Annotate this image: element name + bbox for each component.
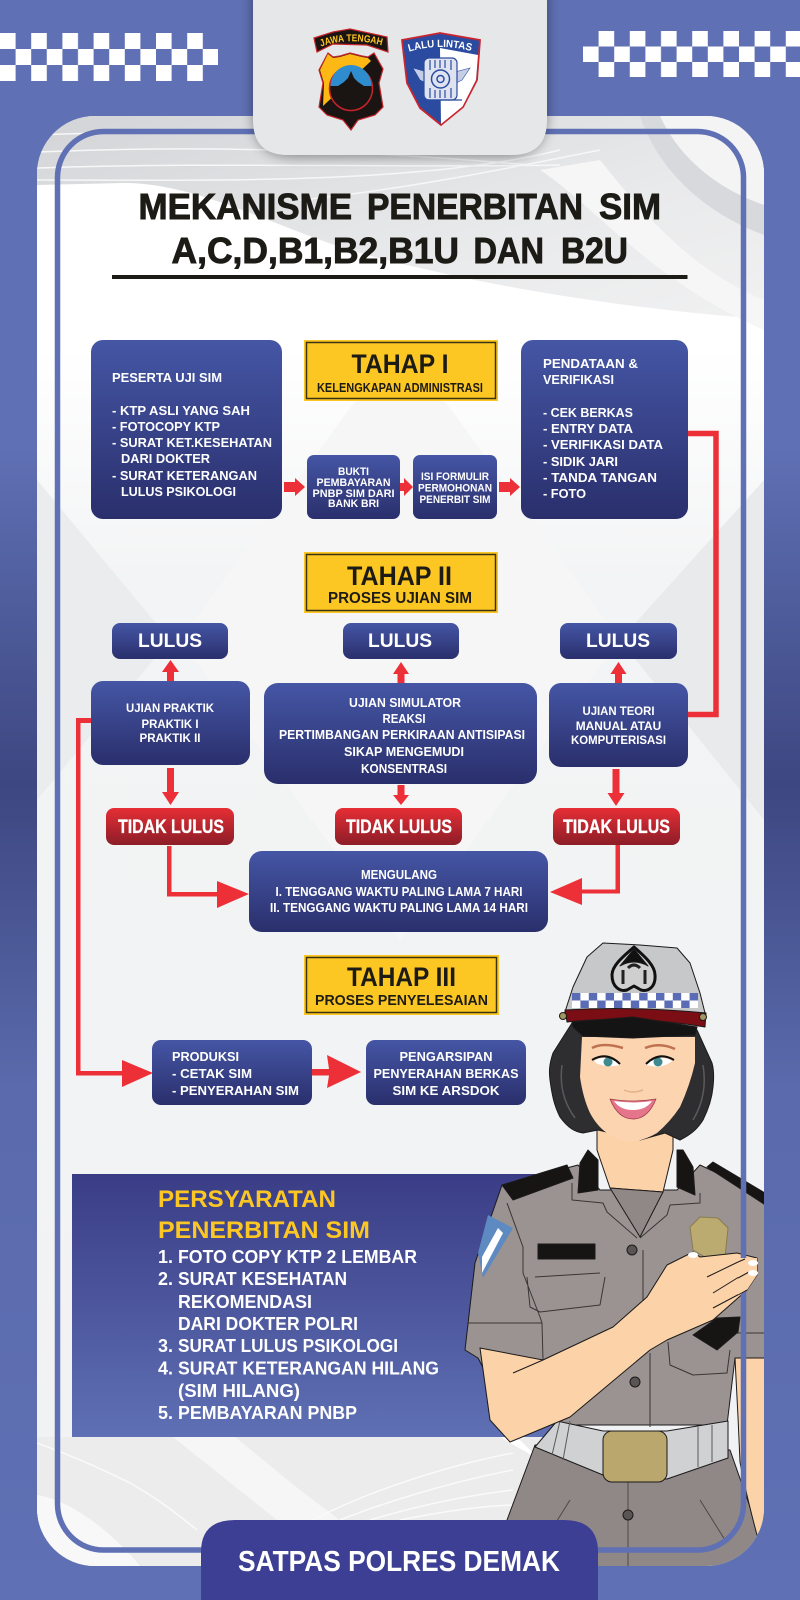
panel: pendataan dan verifikasi	[521, 340, 688, 519]
panel: mengulang: I. TENGGANG WAKTU PALING LAMA 7 HARI	[276, 884, 522, 899]
panel: ujian praktik	[91, 681, 250, 765]
panel: ujian teori: UJIAN TEORI	[582, 704, 654, 718]
heading: tahap II: TAHAP II	[347, 561, 452, 591]
officer pocket flap	[693, 1317, 740, 1350]
heading: title: MEKANISME	[138, 186, 352, 227]
officer right eye	[646, 1056, 674, 1067]
panel: persyaratan penerbitan sim: SURAT KESEHATAN	[178, 1269, 347, 1289]
arrow: praktik to produksi	[76, 718, 153, 1087]
officer buttons	[627, 1245, 637, 1255]
panel: pendataan dan verifikasi: - VERIFIKASI DATA	[543, 437, 664, 452]
officer badge	[690, 1217, 728, 1260]
logo: lalu lintas	[401, 32, 481, 126]
panel: bukti pembayaran: BANK BRI	[328, 498, 379, 510]
panel: mengulang: II. TENGGANG WAKTU PALING LAMA 14 HARI	[270, 900, 528, 915]
panel: peserta uji sim: - FOTOCOPY KTP	[112, 419, 220, 434]
officer face	[580, 1037, 695, 1142]
heading: title: B2U	[561, 230, 628, 271]
panel: ujian praktik: UJIAN PRAKTIK	[126, 703, 215, 715]
panel: persyaratan penerbitan sim: PERSYARATAN	[158, 1186, 336, 1213]
officer hat emblem	[612, 947, 655, 990]
heading: tahap I	[304, 340, 498, 401]
officer shirt	[465, 1165, 770, 1425]
footer tab: satpas polres demak	[201, 1520, 598, 1600]
arrow: bukti to isi formulir	[400, 478, 413, 496]
arrow: praktik to tidak lulus	[162, 768, 179, 805]
illustration: police officer	[465, 943, 770, 1575]
panel: ujian simulator: PERTIMBANGAN PERKIRAAN ANTISIPASI	[279, 727, 525, 742]
arrow: praktik to lulus	[162, 660, 179, 681]
logo: lalu lintas: LALU LINTAS	[408, 40, 472, 52]
panel: persyaratan penerbitan sim: DARI DOKTER POLRI	[178, 1314, 358, 1334]
heading: tahap I: TAHAP I	[352, 349, 448, 379]
heading: tahap II: PROSES UJIAN SIM	[328, 590, 472, 607]
panel: produksi: - CETAK SIM	[172, 1067, 252, 1081]
panel: persyaratan penerbitan sim: REKOMENDASI	[178, 1292, 312, 1312]
logo: jawa tengah: JAWA TENGAH	[320, 34, 383, 46]
result: tidak lulus simulator: TIDAK LULUS	[346, 816, 452, 838]
panel: ujian simulator: KONSENTRASI	[361, 761, 447, 776]
panel: pengarsipan: PENGARSIPAN	[400, 1050, 492, 1064]
officer hat	[563, 943, 706, 1018]
connector: pendataan to ujian teori	[688, 434, 716, 714]
illustration: officer fingertips over frame	[738, 1258, 758, 1296]
logo: jawa tengah	[313, 28, 389, 131]
panel: persyaratan penerbitan sim: 3.	[158, 1336, 173, 1356]
result: tidak lulus simulator	[335, 808, 462, 845]
panel: peserta uji sim: - KTP ASLI YANG SAH	[112, 403, 250, 418]
panel: ujian teori: MANUAL ATAU	[576, 719, 661, 733]
panel: bukti pembayaran	[307, 455, 400, 519]
panel: peserta uji sim: PESERTA UJI SIM	[112, 370, 222, 385]
result: tidak lulus praktik: TIDAK LULUS	[118, 816, 224, 838]
panel: pendataan dan verifikasi: PENDATAAN &	[543, 356, 638, 371]
heading: title: A,C,D,B1,B2,B1U	[172, 230, 459, 271]
panel: pendataan dan verifikasi: - ENTRY DATA	[543, 421, 634, 436]
arrow: tidak lulus teori to mengulang	[550, 845, 620, 905]
panel: persyaratan penerbitan sim: SURAT LULUS PSIKOLOGI	[178, 1336, 398, 1356]
panel: persyaratan penerbitan sim: PENERBITAN SIM	[158, 1217, 370, 1244]
arrow: isi formulir to pendataan	[499, 478, 520, 496]
result: tidak lulus teori	[553, 808, 680, 845]
officer arm	[480, 1252, 757, 1442]
officer belt buckle	[603, 1431, 667, 1482]
heading: tahap III: TAHAP III	[347, 962, 456, 992]
officer hair	[549, 1023, 714, 1140]
panel: persyaratan penerbitan sim: PEMBAYARAN PNBP	[178, 1403, 357, 1423]
checker pattern right	[583, 31, 800, 77]
panel: pengarsipan	[366, 1040, 526, 1105]
result: lulus praktik	[112, 623, 228, 659]
officer name tag	[538, 1244, 595, 1259]
arrow: produksi to pengarsipan	[312, 1055, 361, 1088]
panel: peserta uji sim: - SURAT KETERANGAN	[112, 468, 257, 483]
panel: peserta uji sim	[91, 340, 282, 519]
arrow: peserta to bukti	[284, 478, 305, 496]
panel: persyaratan penerbitan sim: (SIM HILANG)	[178, 1381, 300, 1401]
panel: ujian simulator: UJIAN SIMULATOR	[349, 695, 462, 710]
panel: ujian simulator: SIKAP MENGEMUDI	[344, 744, 464, 759]
panel: produksi	[152, 1040, 312, 1105]
panel: isi formulir	[413, 455, 497, 519]
panel: persyaratan penerbitan sim: SURAT KETERANGAN HILANG	[178, 1358, 439, 1378]
panel: ujian simulator	[264, 683, 537, 784]
panel: isi formulir: PERMOHONAN	[418, 482, 492, 494]
panel: persyaratan penerbitan sim: 5.	[158, 1403, 173, 1423]
panel: pengarsipan: PENYERAHAN BERKAS	[374, 1067, 518, 1081]
officer neck	[597, 1130, 673, 1192]
panel: pendataan dan verifikasi: - TANDA TANGAN	[543, 470, 657, 485]
officer skirt	[506, 1444, 759, 1566]
arrow: teori to tidak lulus	[608, 769, 624, 806]
arrow: tidak lulus praktik to mengulang	[167, 846, 249, 908]
panel: isi formulir: ISI FORMULIR	[421, 471, 489, 483]
panel: pendataan dan verifikasi: VERIFIKASI	[543, 372, 614, 387]
panel: peserta uji sim: LULUS PSIKOLOGI	[121, 484, 236, 499]
panel: pendataan dan verifikasi: - SIDIK JARI	[543, 454, 618, 469]
panel: persyaratan penerbitan sim: FOTO COPY KTP 2 LEMBAR	[178, 1247, 417, 1267]
logo tab	[246, 0, 554, 165]
officer epaulets and collar	[502, 1150, 770, 1208]
panel: persyaratan penerbitan sim: 4.	[158, 1358, 173, 1378]
panel: mengulang: MENGULANG	[361, 867, 437, 882]
panel: pendataan dan verifikasi: - FOTO	[543, 486, 586, 501]
heading: title: DAN	[474, 230, 544, 271]
officer brows	[592, 1045, 675, 1049]
panel: ujian praktik: PRAKTIK I	[142, 719, 198, 731]
panel: mengulang	[249, 851, 548, 932]
panel: bukti pembayaran: PEMBAYARAN	[316, 477, 391, 489]
panel: bukti pembayaran: BUKTI	[338, 466, 369, 478]
result: lulus teori: LULUS	[586, 630, 650, 652]
result: lulus simulator	[343, 623, 459, 659]
arrow: simulator to lulus	[393, 662, 409, 683]
checker pattern left	[0, 33, 218, 81]
panel: isi formulir: PENERBIT SIM	[420, 494, 490, 506]
heading: tahap II	[304, 552, 498, 613]
result: lulus praktik: LULUS	[138, 630, 202, 652]
officer nose	[624, 1090, 643, 1092]
heading: tahap III	[304, 955, 499, 1015]
panel: ujian simulator: REAKSI	[382, 711, 426, 726]
panel: ujian teori: KOMPUTERISASI	[571, 733, 666, 747]
result: lulus teori	[560, 623, 677, 659]
heading: tahap III: PROSES PENYELESAIAN	[315, 992, 488, 1009]
result: tidak lulus praktik	[106, 808, 234, 845]
heading: title	[112, 186, 688, 279]
panel: produksi: PRODUKSI	[172, 1050, 239, 1064]
panel: peserta uji sim: DARI DOKTER	[121, 451, 211, 466]
arrow: teori to lulus	[610, 662, 626, 683]
panel: persyaratan penerbitan sim	[72, 1174, 575, 1437]
panel: pendataan dan verifikasi: - CEK BERKAS	[543, 405, 633, 420]
result: lulus simulator: LULUS	[368, 630, 432, 652]
heading: title: SIM	[599, 186, 661, 227]
panel: ujian praktik: PRAKTIK II	[140, 733, 200, 745]
result: tidak lulus teori: TIDAK LULUS	[563, 816, 670, 838]
officer belt	[535, 1421, 728, 1479]
officer mouth	[610, 1099, 656, 1119]
officer right arm	[734, 1358, 764, 1536]
panel: ujian teori	[549, 683, 688, 767]
arrow: simulator to tidak lulus	[393, 785, 409, 805]
officer sleeve patch	[478, 1215, 513, 1278]
panel: persyaratan penerbitan sim: 2.	[158, 1269, 173, 1289]
panel: bukti pembayaran: PNBP SIM DARI	[312, 488, 394, 500]
heading: title: PENERBITAN	[367, 186, 583, 227]
panel: produksi: - PENYERAHAN SIM	[172, 1084, 299, 1098]
heading: tahap I: KELENGKAPAN ADMINISTRASI	[317, 381, 483, 395]
footer tab: satpas polres demak: SATPAS POLRES DEMAK	[238, 1546, 560, 1578]
officer left eye	[592, 1056, 620, 1066]
panel: pengarsipan: SIM KE ARSDOK	[392, 1084, 500, 1098]
inner frame line	[58, 132, 744, 1550]
panel: persyaratan penerbitan sim: 1.	[158, 1247, 173, 1267]
panel: peserta uji sim: - SURAT KET.KESEHATAN	[112, 435, 272, 450]
